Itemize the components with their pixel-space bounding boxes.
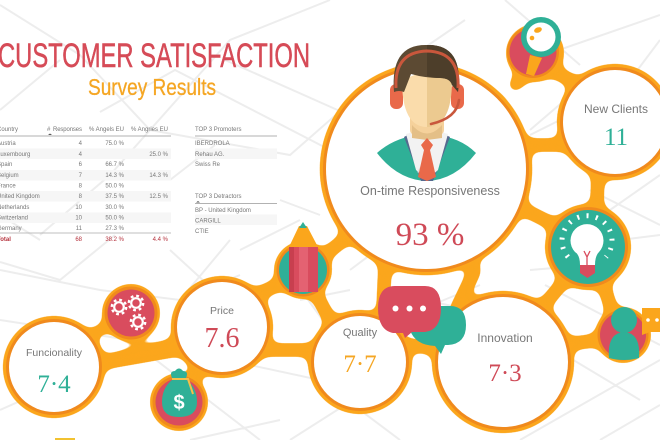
survey table: 11 [76, 226, 83, 232]
survey table: 8 [79, 194, 83, 200]
survey table: 38.2 % [105, 237, 125, 243]
survey table: 66.7 % [105, 162, 125, 168]
survey table: 10 [75, 205, 83, 211]
small speech bubble [642, 308, 660, 335]
top 3 promoters: TOP 3 Promoters [195, 127, 241, 133]
circle: new clients [560, 67, 660, 177]
icon: magnifier [507, 17, 561, 78]
circle: funcionality [6, 319, 102, 415]
survey table: 4 [79, 141, 83, 147]
title [0, 37, 310, 100]
label: Innovation [477, 331, 533, 345]
label: New Clients [584, 102, 648, 116]
icon: agent with headset [377, 45, 476, 181]
survey table: 4.4 % [153, 237, 169, 243]
survey table: 30.0 % [105, 205, 125, 211]
survey table: 50.0 % [105, 216, 125, 222]
survey table: 12.5 % [149, 194, 169, 200]
survey table: 27.3 % [105, 226, 125, 232]
icon: money bag: $ [173, 392, 185, 414]
top 3 promoters: Rehau AG. [195, 152, 225, 158]
survey table: # [47, 127, 51, 133]
top 3 detractors: CARGILL [195, 218, 221, 224]
circle: price [174, 279, 270, 375]
top 3 detractors: CTIE [195, 229, 209, 235]
bottom yellow tab [55, 438, 75, 440]
survey table [0, 127, 171, 243]
survey table: 37.5 % [105, 194, 125, 200]
top 3 promoters: Swiss Re [195, 162, 221, 168]
label: Funcionality [26, 347, 83, 359]
subtitle: Survey Results [88, 74, 216, 100]
survey table: 14.3 % [149, 173, 169, 179]
value: 7.6 [204, 323, 240, 354]
top 3 promoters [195, 127, 277, 168]
icon: pencil [276, 222, 330, 296]
survey table: 6 [79, 162, 83, 168]
label: Price [210, 305, 234, 317]
label: Quality [343, 327, 378, 339]
icon: person [598, 307, 660, 360]
label: On-time Responsiveness [360, 184, 500, 198]
wedge between funcionality and price [95, 337, 180, 371]
title: CUSTOMER SATISFACTION [0, 37, 310, 75]
circle: innovation [435, 294, 571, 430]
icon: money bag [152, 368, 206, 428]
top 3 detractors: TOP 3 Detractors [195, 194, 241, 200]
value: 11 [604, 124, 628, 151]
survey table: 75.0 % [105, 141, 125, 147]
top 3 detractors: BP - United Kingdom [195, 208, 251, 214]
icon: light bulb [548, 207, 628, 287]
survey table: 14.3 % [105, 173, 125, 179]
survey table: Responses [53, 127, 82, 133]
survey table: 7 [79, 173, 83, 179]
survey table: 50.0 % [105, 184, 125, 190]
value: 7·3 [488, 360, 522, 387]
survey table: 4 [79, 152, 83, 158]
survey table: % Angels EU [89, 127, 124, 133]
survey table: % Angries EU [131, 127, 168, 133]
top 3 promoters: IBERDROLA [195, 141, 230, 147]
survey table: 68 [75, 237, 83, 243]
circle: quality [311, 313, 409, 411]
value: 7·4 [37, 371, 71, 398]
value: 7·7 [343, 351, 377, 378]
value: 93 % [396, 217, 464, 253]
top 3 detractors [195, 194, 277, 235]
icon: speech bubbles [378, 286, 466, 354]
survey table: 25.0 % [149, 152, 169, 158]
icon: gears [104, 286, 158, 340]
survey table: 10 [75, 216, 83, 222]
circle: on-time responsiveness [323, 45, 529, 272]
survey table: 8 [79, 184, 83, 190]
